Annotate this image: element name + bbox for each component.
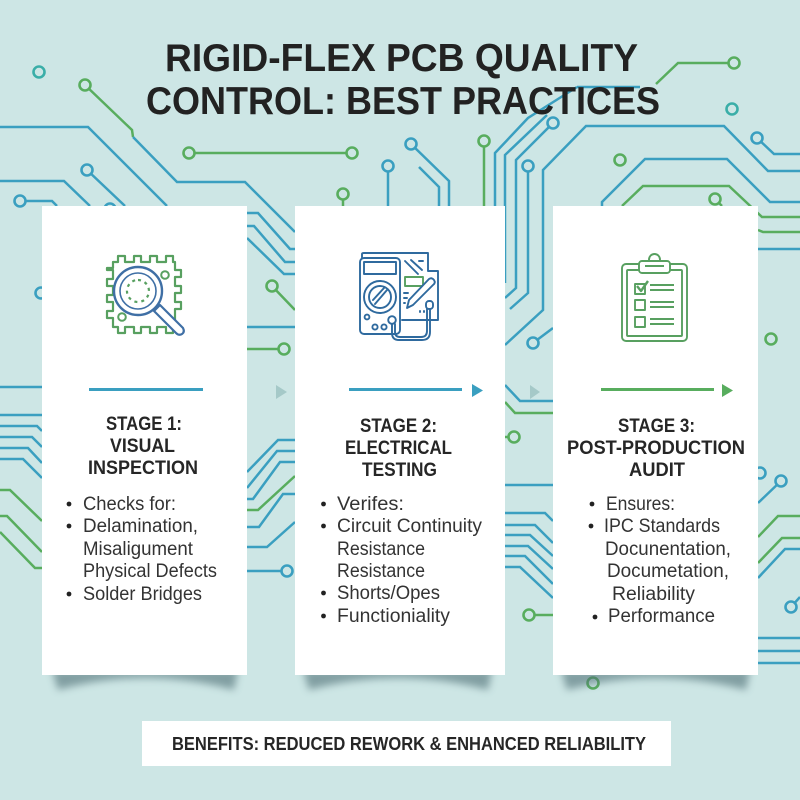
list: stage 1 checks: Solder Bridges [83, 584, 202, 605]
list: stage 1 checks: Delamination, [83, 516, 198, 537]
title: RIGID-FLEX PCB QUALITY [165, 37, 638, 80]
icon: multimeter and pencil [360, 253, 438, 340]
heading: stage 1: VISUAL [110, 436, 175, 457]
list: stage 3 checks: IPC Standards [604, 516, 720, 537]
heading: stage 3: POST-PRODUCTION [567, 438, 745, 459]
heading: stage 1 [88, 414, 198, 479]
icon: clipboard checklist [622, 254, 687, 341]
list: stage 1 checks: Checks for: [83, 494, 176, 515]
heading: stage 1: INSPECTION [88, 458, 198, 479]
list: stage 1 checks: Misaligument [83, 539, 194, 560]
list: stage 2 checks: Verifes: [337, 494, 404, 515]
list: stage 3 checks: Reliability [612, 584, 696, 605]
list: stage 2 checks: Functioniality [337, 606, 451, 627]
list: stage 1 checks: Physical Defects [83, 561, 217, 582]
icon: magnifier over circuit chip [107, 256, 184, 335]
heading: stage 2 [345, 416, 452, 481]
flow arrow: stage 1 to stage 2 [276, 385, 287, 399]
title [146, 37, 660, 123]
list: stage 3 checks: Documetation, [607, 561, 729, 582]
benefits banner: BENEFITS: REDUCED REWORK & ENHANCED RELIABILITY [172, 734, 646, 754]
heading: stage 3: AUDIT [629, 460, 685, 481]
list: stage 3 checks: Ensures: [606, 494, 675, 515]
list: stage 2 checks [321, 494, 482, 627]
heading: stage 2: ELECTRICAL [345, 438, 452, 459]
list: stage 2 checks: Circuit Continuity [337, 516, 482, 537]
divider arrow: stage 3 [601, 384, 733, 397]
benefits banner [142, 721, 671, 766]
list: stage 3 checks: Performance [608, 606, 715, 627]
divider: stage 1 [89, 388, 203, 391]
panel: stage 1 visual inspection [42, 206, 247, 690]
heading: stage 3: STAGE 3: [618, 416, 695, 437]
heading: stage 3 [567, 416, 745, 481]
list: stage 2 checks: Resistance [337, 561, 425, 582]
heading: stage 1: STAGE 1: [106, 414, 182, 435]
list: stage 3 checks [589, 494, 731, 627]
list: stage 1 checks [67, 494, 217, 605]
panel: stage 2 electrical testing [295, 206, 505, 690]
heading: stage 2: TESTING [362, 460, 437, 481]
flow arrow: stage 2 to stage 3 [530, 385, 540, 399]
title: CONTROL: BEST PRACTICES [146, 80, 660, 123]
panel: stage 3 post-production audit [553, 206, 758, 690]
list: stage 2 checks: Resistance [337, 539, 425, 560]
divider arrow: stage 2 [349, 384, 483, 397]
list: stage 2 checks: Shorts/Opes [337, 583, 440, 604]
list: stage 3 checks: Docunentation, [605, 539, 731, 560]
circuit trace background [0, 58, 800, 688]
heading: stage 2: STAGE 2: [360, 416, 437, 437]
